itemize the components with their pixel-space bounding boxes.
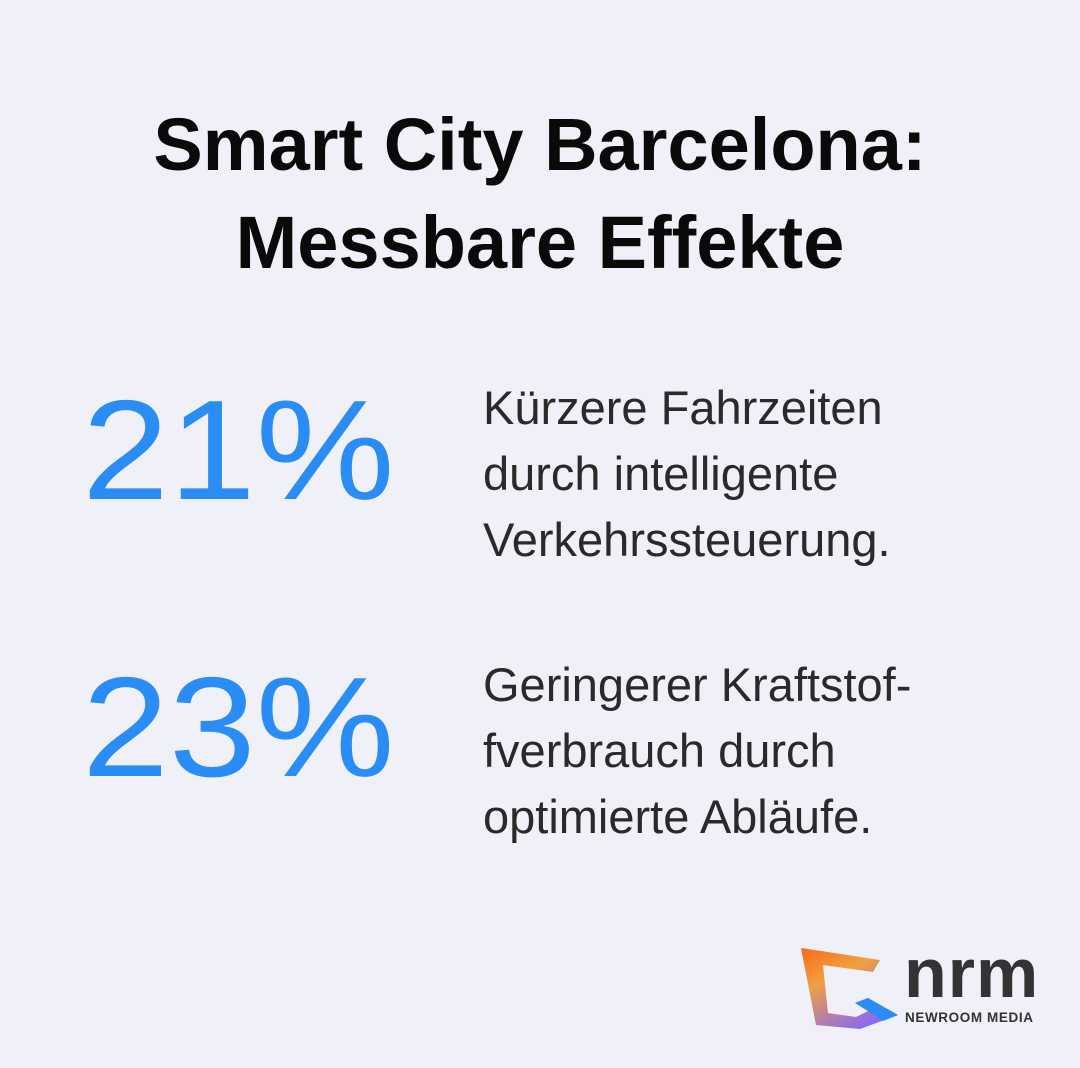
title: Messbare Effekte <box>236 201 844 284</box>
text: nrm: nrm <box>904 934 1039 1012</box>
text: NEWROOM MEDIA: NEWROOM MEDIA <box>905 1010 1034 1025</box>
text: stat 2 description: optimierte Abläufe. <box>483 790 872 843</box>
stat: 21%: 21% <box>82 371 395 530</box>
text: stat 1 description: Kürzere Fahrzeiten <box>483 381 883 434</box>
text: stat 1 description <box>483 381 891 566</box>
text: stat 2 description: Geringerer Kraftstof- <box>483 658 911 711</box>
text: stat 2 description: fverbrauch durch <box>483 724 836 777</box>
title <box>153 103 927 284</box>
stat: 23%: 23% <box>82 648 395 807</box>
text: stat 1 description: durch intelligente <box>483 447 838 500</box>
logo: nrm newroom media <box>801 934 1039 1029</box>
icon: logo mark <box>801 948 898 1029</box>
text: stat 2 description <box>483 658 911 843</box>
title: Smart City Barcelona: <box>153 103 927 186</box>
text: stat 1 description: Verkehrssteuerung. <box>483 513 891 566</box>
